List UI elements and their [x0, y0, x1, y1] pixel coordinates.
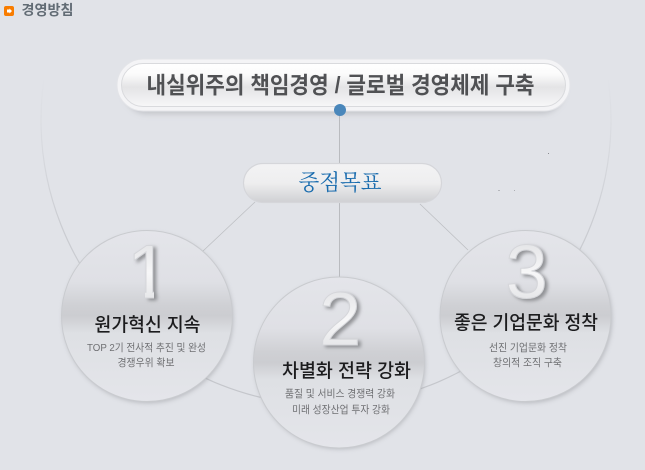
circle 1: cost innovation: [62, 230, 233, 403]
circle 3: corporate culture: [440, 230, 612, 403]
number 3: 3: [505, 230, 548, 315]
connector lines: [203, 110, 468, 278]
description 3: 선진 기업문화 정착: [489, 341, 567, 354]
title 3: 좋은 기업문화 정착: [454, 312, 598, 334]
description 1: [87, 341, 206, 369]
description 3: [489, 341, 567, 369]
key objectives pill: [244, 164, 442, 202]
connector dot: [334, 104, 346, 116]
background arc: [41, 0, 611, 405]
title 1: 원가혁신 지속: [94, 314, 200, 336]
page heading: [4, 2, 74, 18]
heading text: 경영방침: [22, 2, 74, 18]
main goal text: 내실위주의 책임경영 / 글로벌 경영체제 구축: [146, 72, 534, 98]
title 2: 차별화 전략 강화: [282, 360, 411, 382]
circle 2: differentiation strategy: [254, 277, 425, 449]
description 2: [285, 387, 395, 416]
specks: [498, 153, 549, 191]
description 3: 창의적 조직 구축: [493, 357, 562, 369]
description 1: TOP 2기 전사적 추진 및 완성: [87, 341, 206, 354]
description 2: 미래 성장산업 투자 강화: [292, 403, 390, 416]
number 2: 2: [319, 277, 361, 362]
description 1: 경쟁우위 확보: [118, 356, 175, 369]
main goal pill: [117, 59, 570, 114]
number 1: 1: [127, 230, 169, 315]
icon: orange bullet: [4, 6, 14, 16]
description 2: 품질 및 서비스 경쟁력 강화: [285, 387, 395, 400]
key objectives text: 중점목표: [298, 170, 382, 195]
